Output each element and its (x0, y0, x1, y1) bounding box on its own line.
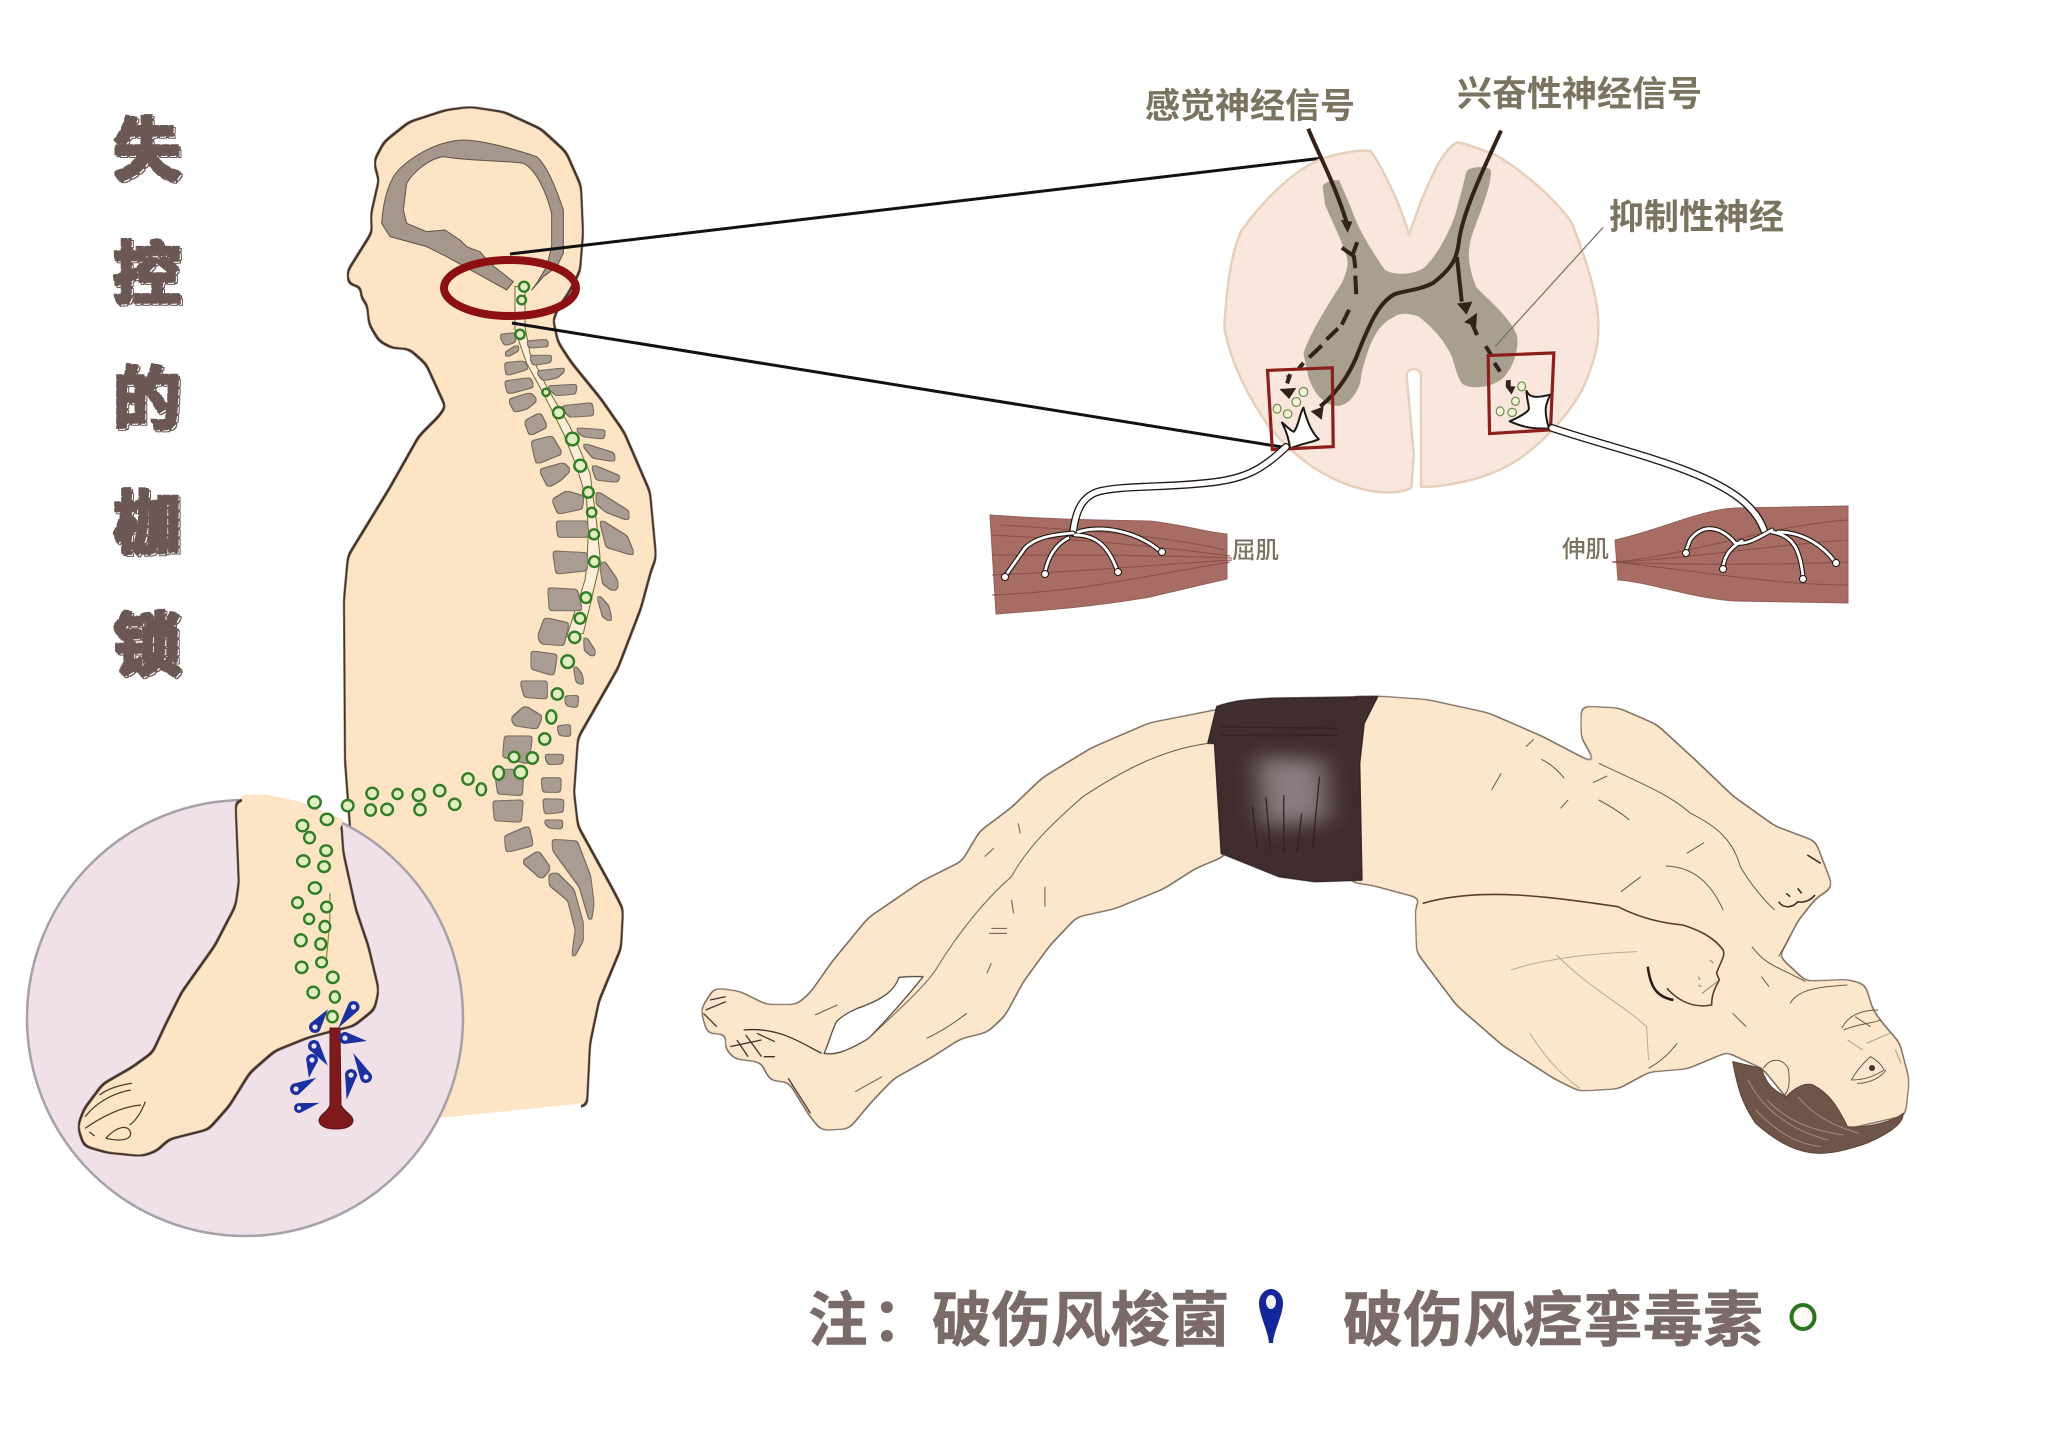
spinal cord (515, 287, 600, 637)
zoom line upper (510, 158, 1323, 254)
standing human figure with spine (345, 108, 655, 1124)
legend icon: bacillus (1259, 1289, 1283, 1343)
branch outlines (1006, 529, 1835, 577)
legend text: tetanus bacillus: ： (872, 1287, 932, 1354)
body silhouette (345, 108, 655, 1122)
excitatory nerve signal path (1320, 131, 1501, 406)
gray matter (1303, 167, 1518, 406)
motor nerve fibres and endplates (1002, 428, 1840, 582)
legend icon: toxin (1792, 1305, 1814, 1329)
leg detail lines (703, 743, 1208, 1113)
circle background (27, 800, 463, 1236)
label: sensory nerve signal: 感觉神经信号 (1145, 87, 1355, 126)
muscle, arm and face detail lines (1423, 739, 1901, 1097)
nerve tube outlines (1073, 428, 1764, 533)
spinal cord cross-section (1224, 129, 1603, 492)
toes and nerve lines (85, 893, 330, 1140)
sensory arrowhead (1341, 220, 1352, 233)
label: extensor: 伸肌 (1562, 536, 1609, 562)
flexor muscle (990, 515, 1232, 614)
label: inhibitory nerve: 抑制性神经 (1609, 198, 1784, 237)
tetanus bacilli (288, 999, 374, 1114)
hair (1733, 1062, 1903, 1153)
red ring around brainstem (444, 260, 576, 316)
toxin along spine (413, 282, 600, 815)
bacilli holes (293, 1004, 369, 1110)
vertebrae (493, 333, 634, 961)
title: 失控的枷锁: 控 (113, 237, 181, 313)
right motor neuron (1510, 391, 1550, 429)
excitatory arrowheads (1311, 302, 1477, 420)
brain band (382, 140, 563, 290)
extensor fibres (1612, 520, 1848, 585)
opisthotonus figure (701, 697, 1909, 1153)
title: 失控的枷锁: 锁 (113, 608, 181, 684)
right red box (1488, 353, 1554, 434)
title: 失控的枷锁: 的 (113, 362, 181, 438)
legend (808, 1287, 1814, 1354)
wound nail (319, 1028, 353, 1129)
body skin (701, 697, 1909, 1130)
zoom line lower (512, 323, 1282, 447)
endplates (1002, 548, 1840, 582)
legend text: tetanus bacillus: 破伤风梭菌 (932, 1287, 1230, 1354)
toxin in foot and waist (292, 788, 402, 1022)
foot inset circle (27, 799, 463, 1236)
flexor fibres (992, 525, 1232, 595)
tetanus toxin particles along the nerve (292, 282, 600, 1022)
title: 失控的枷锁: 枷 (113, 486, 181, 562)
inhibitory nerve leader line (1495, 227, 1603, 346)
title: 失控的枷锁 (113, 113, 181, 684)
left motor neuron (1282, 408, 1319, 448)
nerve tube interiors (1073, 428, 1764, 533)
face pupil (1869, 1065, 1875, 1071)
shorts (1208, 697, 1378, 882)
gap between legs (824, 976, 923, 1054)
legend text: tetanus bacillus: 注 (808, 1287, 868, 1354)
sensory nerve signal path (1287, 129, 1357, 383)
legend text: tetanus toxin: 破伤风痉挛毒素 (1343, 1287, 1763, 1354)
label: flexor: 屈肌 (1232, 537, 1279, 563)
left red box (1268, 368, 1333, 450)
title: 失控的枷锁: 失 (113, 113, 181, 189)
extensor muscle (1612, 506, 1848, 603)
white matter (1224, 143, 1598, 492)
small arrow and blocker in left box (1279, 375, 1515, 399)
branch interiors (1006, 529, 1835, 577)
foot (79, 799, 378, 1155)
toxin in boxes (1273, 382, 1526, 418)
label: excitatory nerve signal: 兴奋性神经信号 (1457, 75, 1702, 114)
